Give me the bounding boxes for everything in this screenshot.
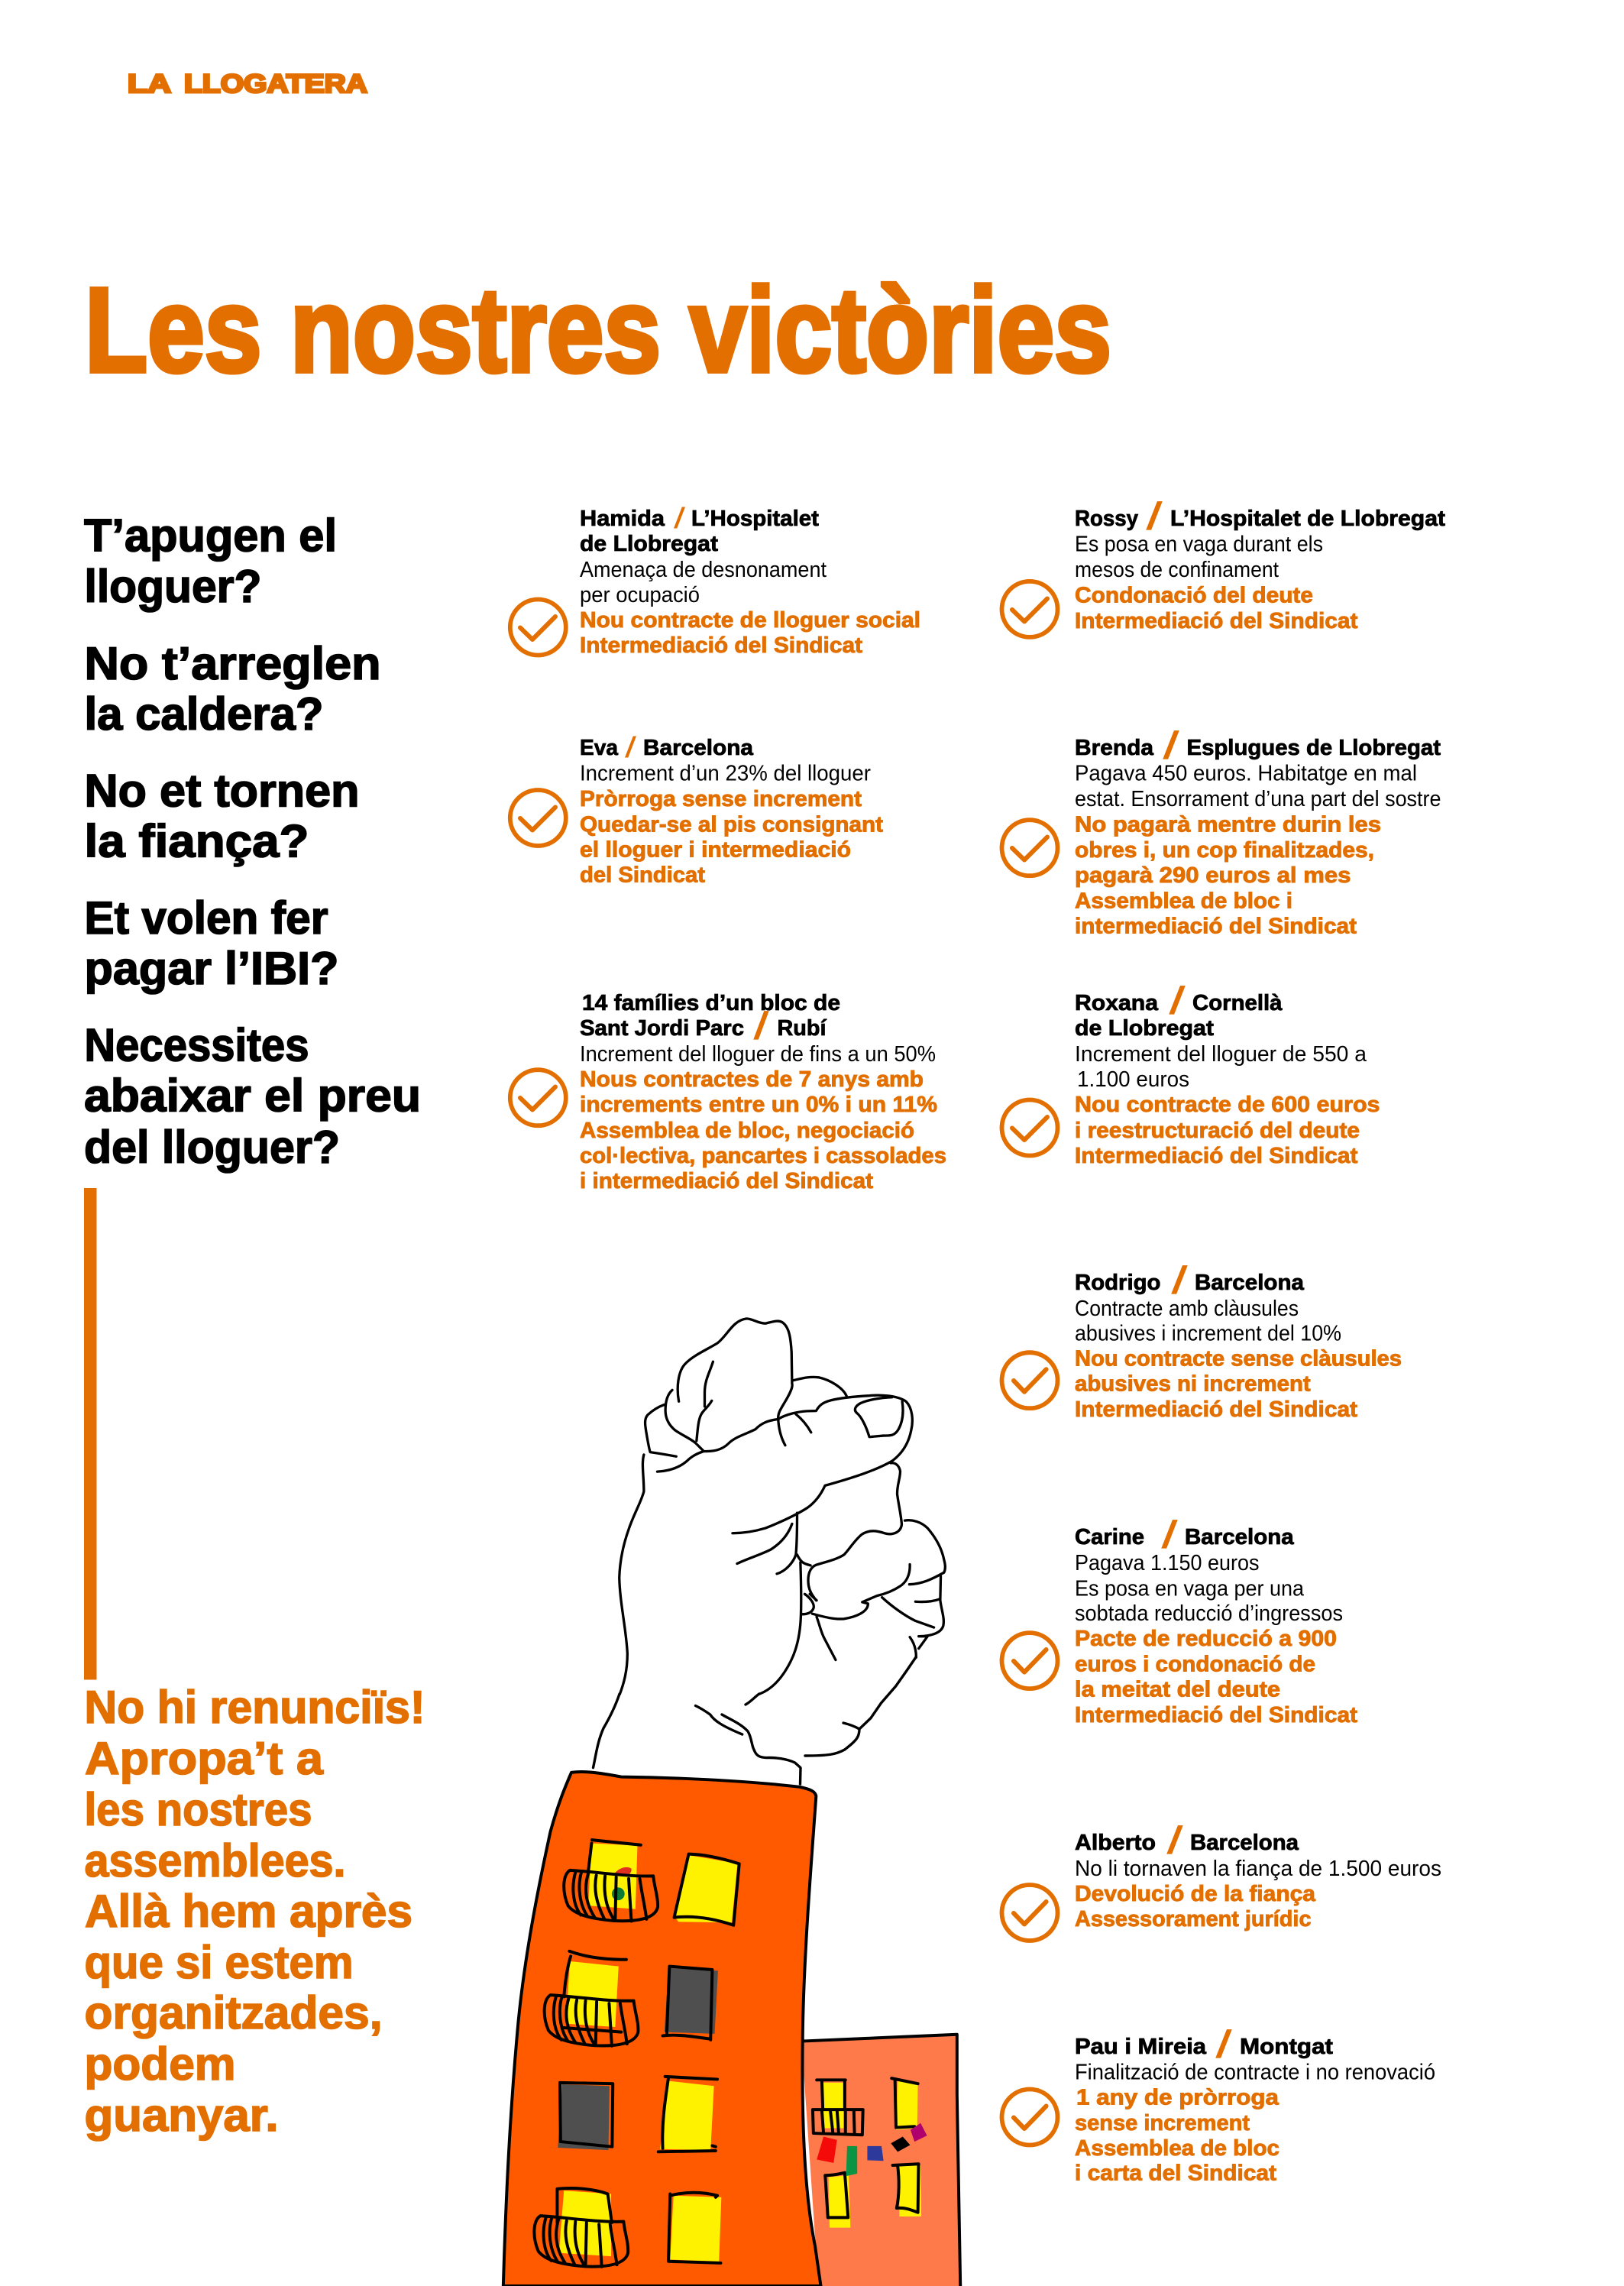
case text: Carine: Carine (1075, 1525, 1144, 1549)
call to action text: guanyar. (84, 2090, 278, 2141)
case text: Roxana: Intermediació del Sindicat (1075, 1144, 1358, 1168)
case text: Alberto: Assessorament jurídic (1075, 1907, 1311, 1931)
logo: La Llogatera (128, 70, 367, 99)
case text: 14 famílies: 14 famílies d’un bloc de (582, 991, 840, 1015)
questions block: No t’arreglen (84, 638, 380, 689)
case text: Carine: Pagava 1.150 euros (1075, 1551, 1259, 1575)
case text: 14 famílies: Sant Jordi Parc (580, 1016, 744, 1041)
case text: Rossy: Es posa en vaga durant els (1075, 532, 1323, 556)
case text: Roxana: Cornellà (1192, 991, 1283, 1015)
case text: Alberto: Barcelona (1190, 1831, 1299, 1855)
illustration: buildings (503, 1772, 960, 2286)
icon: check (1002, 2089, 1057, 2145)
case text: Hamida: Nou contracte de lloguer social (580, 608, 920, 633)
panel: Roxana (1002, 979, 1380, 1168)
case text: Rossy: Rossy (1075, 507, 1138, 531)
case text: Rossy: mesos de confinament (1075, 558, 1279, 582)
case text: Pau i Mireia: Pau i Mireia (1075, 2035, 1207, 2059)
small building window bottom left (825, 2173, 850, 2228)
questions block: pagar l’IBI? (84, 943, 339, 994)
case text: Pau i Mireia: i carta del Sindicat (1075, 2161, 1276, 2186)
case text: Roxana: Increment del lloguer de 550 a (1075, 1042, 1367, 1067)
case text: Carine: euros i condonació de (1075, 1652, 1315, 1676)
case text: Rossy (1075, 495, 1445, 633)
case text: Carine (1075, 1514, 1357, 1727)
case text: 14 famílies: Rubí (778, 1016, 827, 1041)
case text: Brenda: / (1163, 724, 1179, 767)
call to action text: les nostres (84, 1784, 312, 1835)
case text: Hamida: L’Hospitalet (691, 507, 819, 531)
case text: Hamida: Hamida (580, 507, 665, 531)
questions block: Necessites (84, 1019, 309, 1071)
case text: Carine: la meitat del deute (1075, 1678, 1280, 1702)
window yellow row 1 (675, 1854, 739, 1925)
call to action text: Allà hem après (85, 1886, 412, 1937)
icon: check (510, 1070, 566, 1125)
case text: Rodrigo: Contracte amb clàusules (1075, 1297, 1299, 1321)
questions block: T’apugen el (84, 510, 337, 561)
case text: Brenda: obres i, un cop finalitzades, (1075, 838, 1374, 863)
case text: 14 famílies: Increment del lloguer de fins a un 50% (580, 1042, 936, 1067)
panel: Alberto (1002, 1819, 1441, 1941)
case text: Hamida: / (674, 503, 686, 535)
illustration: raised fist (593, 1319, 945, 1784)
call to action text: podem (84, 2038, 235, 2090)
case text: Rodrigo: Intermediació del Sindicat (1075, 1397, 1357, 1422)
case text: Roxana: Roxana (1075, 991, 1159, 1015)
call to action text (84, 1682, 425, 2141)
case text: Carine: Es posa en vaga per una (1075, 1577, 1305, 1601)
case text: Rossy: L’Hospitalet de Llobregat (1170, 507, 1445, 531)
case text: Brenda: intermediació del Sindicat (1075, 914, 1357, 938)
small building balcony window (813, 2080, 863, 2135)
case text: Hamida (580, 503, 920, 658)
call to action text: Apropa’t a (85, 1733, 324, 1784)
panel: Hamida (510, 503, 920, 658)
icon: check (1002, 581, 1057, 637)
case text: Hamida: de Llobregat (580, 532, 718, 556)
case text: Pau i Mireia: Finalització de contracte i no renovació (1075, 2060, 1435, 2084)
case text: Pau i Mireia: Montgat (1240, 2035, 1333, 2059)
case text: Eva: del Sindicat (580, 863, 705, 888)
panel: Rodrigo (1002, 1259, 1402, 1422)
logo: La Llogatera: LA (128, 70, 171, 99)
case text: Hamida: Amenaça de desnonament (580, 558, 827, 582)
questions block: No et tornen (84, 766, 360, 816)
panel: Rossy (1002, 495, 1445, 637)
icon: check (1002, 1100, 1057, 1155)
case text: Brenda: Pagava 450 euros. Habitatge en mal (1075, 761, 1417, 785)
case text: Alberto: / (1167, 1819, 1182, 1862)
case text: Rodrigo: Nou contracte sense clàusules (1075, 1346, 1402, 1371)
panel: Brenda (1002, 724, 1441, 938)
case text: Eva (580, 732, 883, 888)
case text: 14 famílies: / (754, 1005, 768, 1047)
case text: Pau i Mireia (1075, 2023, 1435, 2186)
case text: 14 famílies: Assemblea de bloc, negociació (580, 1119, 914, 1143)
window gray row 2 (663, 1967, 718, 2040)
icon: check (510, 599, 566, 656)
coloured flags (817, 2123, 927, 2176)
main building (503, 1772, 821, 2286)
case text: 14 famílies (580, 991, 946, 1193)
case text: Eva: Increment d’un 23% del lloguer (580, 761, 871, 785)
questions block: lloguer? (84, 561, 261, 612)
title: Les nostres victòries (85, 264, 1111, 397)
questions block: la caldera? (84, 688, 324, 740)
case text: Roxana: i reestructuració del deute (1075, 1119, 1360, 1143)
case text: 14 famílies: increments entre un 0% i un 11% (580, 1093, 937, 1117)
case text: Eva: el lloguer i intermediació (580, 837, 851, 862)
call to action text: assemblees. (84, 1835, 345, 1886)
small building (801, 2035, 960, 2286)
case text: Carine: Intermediació del Sindicat (1075, 1703, 1357, 1727)
questions block (84, 510, 421, 1173)
case text: Rodrigo: abusives i increment del 10% (1075, 1322, 1341, 1346)
case text: Alberto: No li tornaven la fiança de 1.500 euros (1075, 1857, 1441, 1881)
case text: Rodrigo: abusives ni increment (1075, 1372, 1311, 1397)
case text: Eva: Quedar-se al pis consignant (580, 813, 883, 837)
case text: Pau i Mireia: 1 any de pròrroga (1076, 2086, 1279, 2110)
icon: check (510, 790, 566, 846)
case text: Roxana: / (1169, 979, 1185, 1022)
case text: Alberto: Alberto (1075, 1831, 1156, 1855)
window yellow row 3 (658, 2077, 717, 2152)
case text: Roxana: de Llobregat (1075, 1016, 1214, 1041)
case text: Carine: sobtada reducció d’ingressos (1075, 1601, 1343, 1626)
case text: Brenda (1075, 724, 1441, 938)
call to action text: organitzades, (84, 1987, 383, 2038)
call to action text: No hi renunciïs! (84, 1682, 425, 1733)
case text: Rossy: / (1147, 495, 1162, 538)
icon: check (1002, 820, 1057, 876)
case text: 14 famílies: i intermediació del Sindicat (580, 1169, 873, 1193)
case text: Brenda: estat. Ensorrament d’una part del sostre (1075, 787, 1441, 811)
case text: Carine: Barcelona (1185, 1525, 1295, 1549)
balcony window row 1 (564, 1840, 658, 1921)
case text: Carine: Pacte de reducció a 900 (1075, 1627, 1337, 1651)
case text: Pau i Mireia: Assemblea de bloc (1075, 2136, 1279, 2161)
case text: Brenda: Esplugues de Llobregat (1187, 736, 1441, 760)
small building window top right (891, 2078, 918, 2130)
case text: Alberto (1075, 1819, 1441, 1931)
logo: La Llogatera: LLOGATERA (184, 70, 367, 99)
case text: Pau i Mireia: sense increment (1075, 2111, 1250, 2135)
panel: Carine (1002, 1514, 1357, 1727)
case text: Rossy: Condonació del deute (1075, 584, 1313, 608)
panel: Pau i Mireia (1002, 2023, 1435, 2186)
case text: Eva: / (625, 732, 637, 764)
panel: Eva (510, 732, 883, 888)
small building window bottom right (893, 2164, 921, 2216)
case text: Brenda: No pagarà mentre durin les (1075, 813, 1381, 837)
case text: Rodrigo: Rodrigo (1075, 1271, 1161, 1295)
case text: Brenda: Assemblea de bloc i (1075, 889, 1292, 914)
icon: check (1002, 1352, 1057, 1408)
case text: Rodrigo: Barcelona (1195, 1271, 1305, 1295)
case text: Carine: / (1162, 1514, 1177, 1556)
case text: 14 famílies: col·lectiva, pancartes i cassolades (580, 1144, 946, 1168)
case text: Eva: Eva (580, 736, 619, 760)
case text: 14 famílies: Nous contractes de 7 anys amb (580, 1067, 924, 1092)
case text: Pau i Mireia: / (1216, 2023, 1231, 2066)
case text: Rossy: Intermediació del Sindicat (1075, 609, 1358, 633)
case text: Roxana (1075, 979, 1380, 1168)
case text: Rodrigo (1075, 1259, 1402, 1422)
case text: Rodrigo: / (1172, 1259, 1187, 1302)
case text: Eva: Pròrroga sense increment (580, 787, 862, 811)
case text: Roxana: Nou contracte de 600 euros (1075, 1093, 1380, 1117)
questions block: abaixar el preu (84, 1070, 421, 1122)
icon: check (1002, 1633, 1057, 1689)
call to action text: que si estem (84, 1937, 353, 1988)
orange vertical bar (84, 1188, 96, 1679)
window gray row 3 (558, 2083, 613, 2150)
case text: Brenda: pagarà 290 euros al mes (1075, 863, 1351, 888)
case text: Brenda: Brenda (1075, 736, 1154, 760)
case text: Hamida: per ocupació (580, 583, 700, 607)
case text: Roxana: 1.100 euros (1077, 1067, 1189, 1092)
window yellow row 4 (668, 2193, 721, 2263)
icon: check (1002, 1885, 1057, 1941)
case text: Hamida: Intermediació del Sindicat (580, 633, 862, 658)
balcony window row 4 (534, 2188, 628, 2267)
balcony window row 2 (545, 1951, 638, 2046)
case text: Eva: Barcelona (643, 736, 754, 760)
questions block: la fiança? (84, 816, 309, 866)
panel: 14 famílies (510, 991, 946, 1193)
case text: Alberto: Devolució de la fiança (1075, 1882, 1316, 1906)
questions block: Et volen fer (84, 892, 328, 944)
questions block: del lloguer? (84, 1122, 340, 1173)
